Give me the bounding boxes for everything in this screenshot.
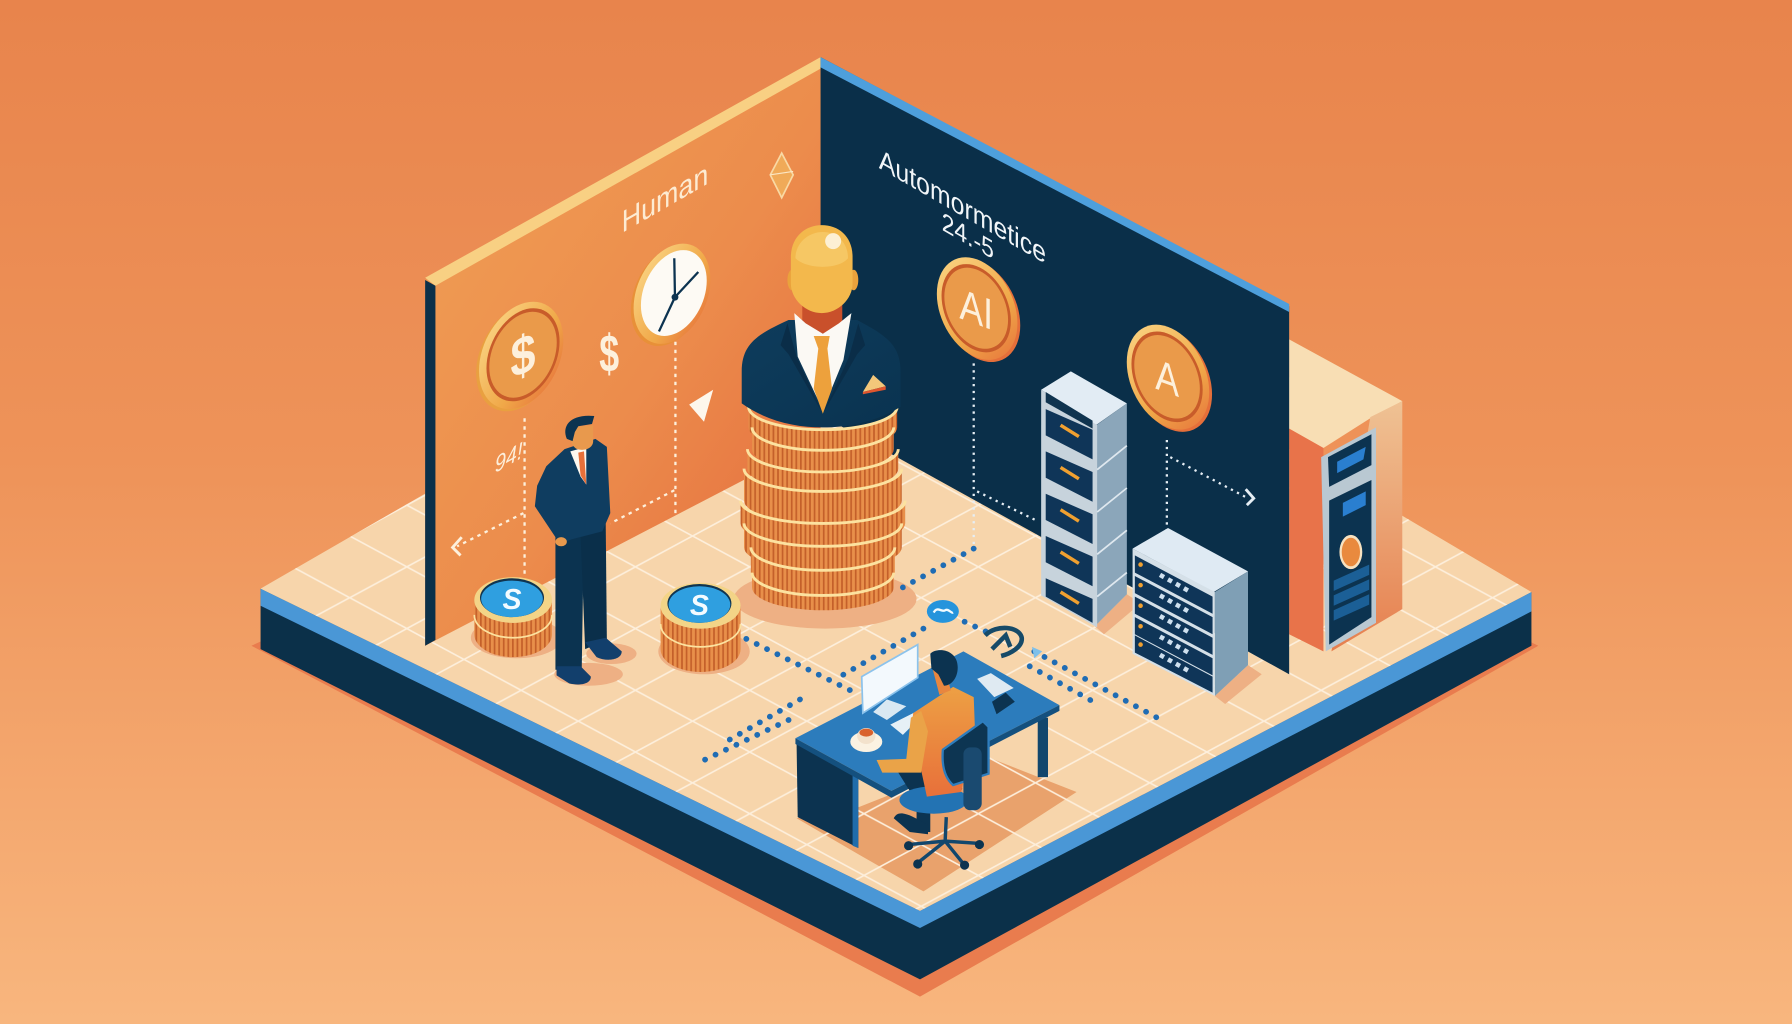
head <box>570 425 593 450</box>
icon: AI coin <box>937 245 1020 375</box>
label: Human: Human <box>622 155 708 240</box>
lapels <box>781 323 865 414</box>
seat <box>899 786 968 814</box>
desk items <box>977 673 1015 714</box>
coin stack: middle small <box>661 583 741 672</box>
neck and ear <box>933 669 951 695</box>
platform shadow <box>251 343 1538 997</box>
head <box>930 650 958 686</box>
desk top <box>795 651 1059 791</box>
jacket <box>535 439 610 544</box>
pocket square <box>863 375 886 394</box>
coffee cup <box>850 728 882 752</box>
icon: navy link glyph <box>985 628 1022 656</box>
icon: clock <box>631 231 710 358</box>
icon: dollar coin: $ <box>511 320 536 390</box>
keyboard <box>890 712 915 735</box>
pedestal <box>797 743 858 848</box>
shirt <box>794 313 851 410</box>
torso <box>909 687 975 797</box>
legs <box>555 528 584 670</box>
server rack: tall <box>1041 371 1127 627</box>
server rack: short <box>1133 528 1248 696</box>
platform <box>261 219 1531 979</box>
icon: AI coin: AI <box>959 279 993 340</box>
shoe <box>894 813 928 834</box>
standing man <box>535 416 622 684</box>
desk rug <box>797 757 1077 891</box>
icon: white triangle <box>689 390 713 422</box>
suit <box>742 320 901 427</box>
hand <box>555 537 567 546</box>
coin stack: left small: S <box>502 584 522 616</box>
coin stack: large <box>741 407 905 610</box>
dotted lines on human wall <box>457 342 675 577</box>
arrow: right <box>1246 489 1254 505</box>
large bust figure <box>742 225 901 427</box>
label: 24.-5: 24.-5 <box>942 206 994 266</box>
icon: A coin: A <box>1155 349 1180 407</box>
dotted lines on automation wall <box>974 363 1248 546</box>
desk and worker <box>795 645 1059 870</box>
icon: small blue triangle <box>1032 647 1042 658</box>
icon: A coin <box>1127 312 1212 445</box>
arrow: left <box>453 537 462 555</box>
shoes <box>557 666 591 684</box>
coin stack: middle small: S <box>690 590 709 622</box>
icon: diamond <box>770 153 793 198</box>
floor tiles <box>261 219 1531 911</box>
wall: automation side <box>821 57 1289 674</box>
tie <box>814 336 832 414</box>
icon: blue badge <box>927 600 959 623</box>
label: 94!: 94! <box>495 436 523 478</box>
arm <box>877 711 928 773</box>
device panel <box>1321 427 1376 651</box>
coin stack: left small <box>474 577 552 657</box>
right leg <box>1038 718 1048 777</box>
monitor <box>862 645 918 720</box>
icon: dollar sign: $ <box>599 323 619 383</box>
storage block behind wall <box>1289 339 1402 651</box>
floor shadows <box>471 569 1262 704</box>
wall: human side <box>425 57 821 646</box>
label: Automormetice: Automormetice <box>879 143 1046 271</box>
neck <box>802 302 842 334</box>
shirt and tie <box>570 447 586 485</box>
hair <box>565 416 594 441</box>
chair back <box>943 721 989 810</box>
head <box>787 225 858 313</box>
chair base <box>904 807 984 870</box>
thighs <box>898 768 962 809</box>
blue dotted connectors <box>699 549 1163 762</box>
icon: dollar coin <box>476 289 563 424</box>
